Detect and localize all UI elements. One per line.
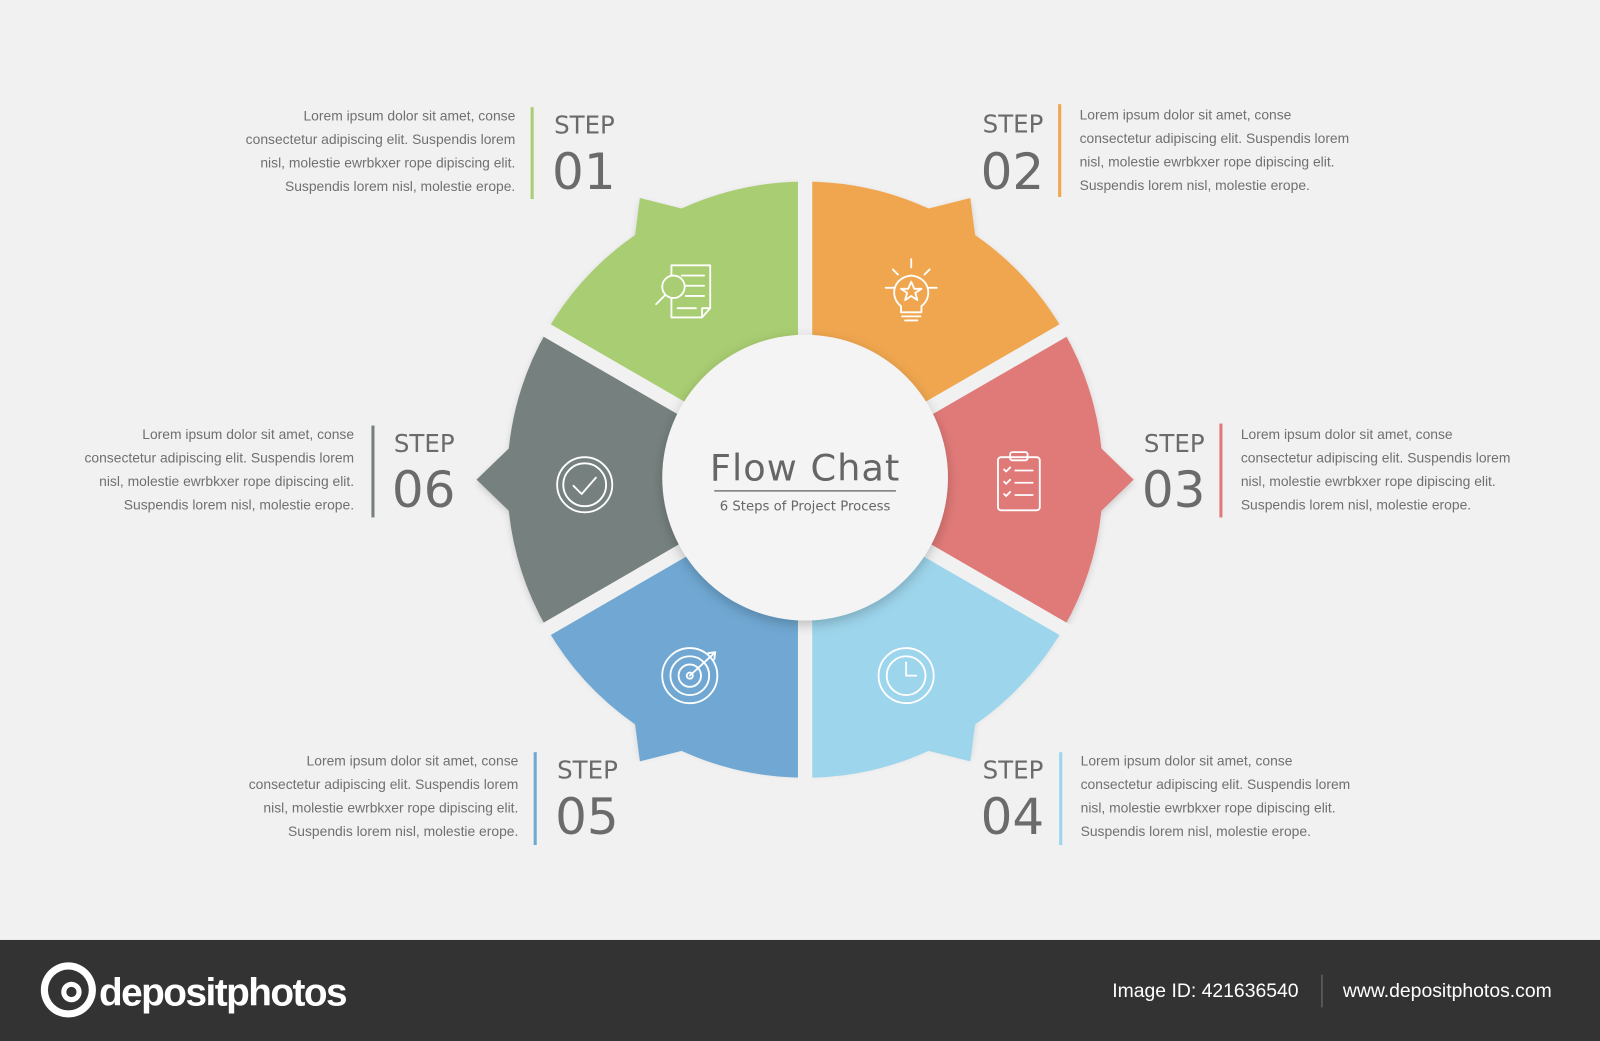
step 05: nisl, molestie ewrbkxer rope dipiscing elit. [263, 799, 518, 815]
step 03: STEP [1144, 429, 1205, 458]
step 05: STEP [557, 756, 618, 785]
step 05: Lorem ipsum dolor sit amet, conse [307, 752, 519, 768]
segment: step 04 light blue [805, 480, 1063, 778]
step 06 [84, 426, 455, 519]
step 06: STEP [394, 429, 455, 458]
footer bar [0, 940, 1600, 1041]
step 04: consectetur adipiscing elit. Suspendis lorem [1081, 776, 1350, 792]
step 02: consectetur adipiscing elit. Suspendis lorem [1080, 130, 1349, 146]
segment: step 03 red [805, 331, 1134, 629]
step 02: 02 [981, 143, 1044, 201]
step 01 [246, 107, 616, 201]
step 01: Suspendis lorem nisl, molestie erope. [285, 178, 515, 194]
segment: step 05 blue [547, 480, 805, 778]
brand name: depositphotos [99, 971, 346, 1014]
title: Flow Chat [710, 447, 900, 490]
step 01: Lorem ipsum dolor sit amet, conse [303, 107, 516, 123]
step 04: STEP [983, 756, 1043, 785]
subtitle: 6 Steps of Project Process [720, 499, 891, 514]
step 06: nisl, molestie ewrbkxer rope dipiscing elit. [99, 473, 354, 489]
step 03: nisl, molestie ewrbkxer rope dipiscing elit. [1241, 473, 1496, 489]
step 04: 04 [981, 788, 1044, 846]
step 05: consectetur adipiscing elit. Suspendis lorem [249, 776, 518, 792]
segment: step 01 green [547, 182, 805, 480]
step 04: nisl, molestie ewrbkxer rope dipiscing elit. [1081, 799, 1336, 815]
step 02 [981, 104, 1349, 201]
step 06: Suspendis lorem nisl, molestie erope. [124, 496, 354, 512]
step 01: 01 [552, 143, 616, 201]
step 04: Lorem ipsum dolor sit amet, conse [1081, 752, 1293, 768]
step 01: consectetur adipiscing elit. Suspendis lorem [246, 131, 515, 147]
step 05: 05 [555, 788, 619, 846]
step 04 [981, 752, 1350, 846]
step 06: consectetur adipiscing elit. Suspendis lorem [84, 449, 354, 465]
url: www.depositphotos.com [1342, 980, 1552, 1002]
segment: step 02 orange [805, 182, 1063, 480]
icon: clock refresh [879, 648, 934, 703]
step 02: Suspendis lorem nisl, molestie erope. [1080, 177, 1310, 193]
step 02: nisl, molestie ewrbkxer rope dipiscing elit. [1080, 153, 1335, 169]
step 06: 06 [392, 461, 455, 519]
step 02: Lorem ipsum dolor sit amet, conse [1080, 106, 1292, 122]
step 01: nisl, molestie ewrbkxer rope dipiscing elit. [260, 154, 515, 170]
step 03: Lorem ipsum dolor sit amet, conse [1241, 426, 1453, 442]
step 03: Suspendis lorem nisl, molestie erope. [1241, 496, 1471, 512]
step 02: STEP [983, 110, 1043, 139]
step 04: Suspendis lorem nisl, molestie erope. [1081, 823, 1311, 839]
segment: step 06 gray [477, 331, 805, 629]
step 03: 03 [1142, 461, 1205, 519]
step 06: Lorem ipsum dolor sit amet, conse [142, 426, 354, 442]
image id: Image ID: 421636540 [1112, 980, 1299, 1002]
step 05: Suspendis lorem nisl, molestie erope. [288, 823, 518, 839]
step 03: consectetur adipiscing elit. Suspendis lorem [1241, 449, 1510, 465]
icon: light bulb [886, 259, 937, 320]
wheel [477, 133, 1134, 827]
step 05 [249, 752, 619, 846]
icon: logo camera [41, 962, 96, 1018]
step 01: STEP [554, 111, 615, 140]
icon: clipboard checklist [998, 452, 1040, 510]
icon: check circle [557, 457, 612, 512]
icon: target [662, 648, 717, 703]
center circle [662, 335, 948, 621]
step 03 [1142, 424, 1510, 519]
icon: document search [656, 265, 710, 317]
